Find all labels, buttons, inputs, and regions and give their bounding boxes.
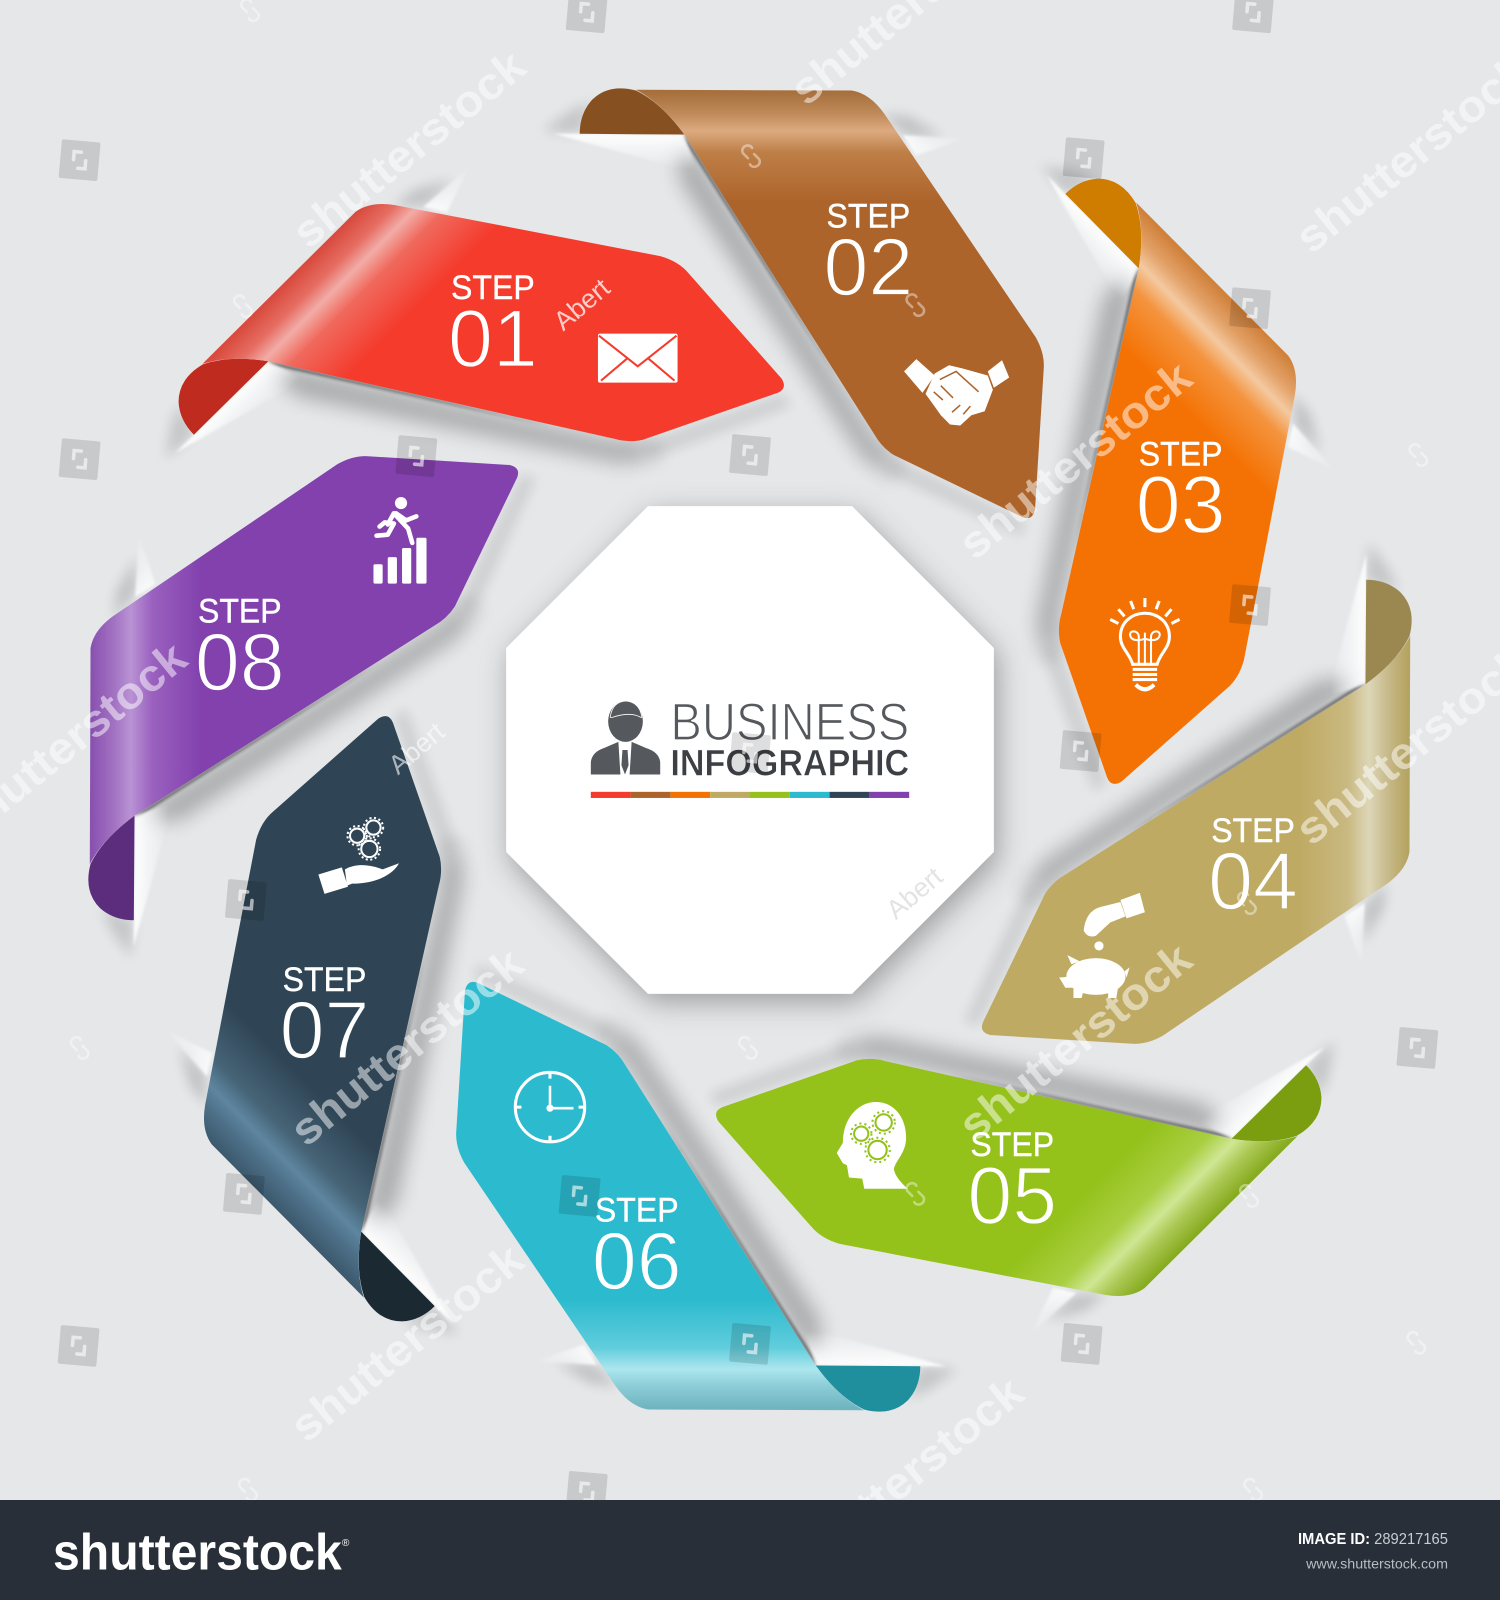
ribbon shape 04 <box>924 539 1500 1192</box>
step 06 number: 06 <box>592 1216 682 1307</box>
watermark: Abert <box>548 272 616 336</box>
watermark: Abert <box>383 716 451 780</box>
icon: runner on bar chart <box>373 497 427 584</box>
step 07 number: 07 <box>280 985 369 1076</box>
watermark: shutterstock <box>280 938 533 1156</box>
octagon face <box>506 506 994 994</box>
footer bar <box>0 1500 1500 1600</box>
footer logo: shutterstock <box>53 1523 342 1580</box>
step 04 label: STEP <box>1211 812 1295 850</box>
octagon shadow <box>510 514 998 1002</box>
step 08 number: 08 <box>195 617 285 708</box>
image id: IMAGE ID: 289217165 <box>1298 1531 1448 1548</box>
watermark: Abert <box>880 861 949 925</box>
panel: step 06 ribbon <box>308 924 961 1576</box>
watermark: shutterstock <box>280 1233 533 1452</box>
ribbon shape 01 <box>165 166 791 463</box>
heading: business: BUSINESS <box>670 693 909 752</box>
icon: light bulb <box>1110 598 1180 689</box>
icon: piggy bank <box>1059 893 1145 998</box>
panel: step 07 ribbon <box>166 709 463 1335</box>
panel: step 08 ribbon <box>0 308 576 961</box>
step 07 label: STEP <box>283 961 366 999</box>
panel: central octagon <box>506 506 998 1002</box>
icon: envelope <box>598 334 678 383</box>
ribbon shape 05 <box>709 1037 1335 1334</box>
panel: step 05 ribbon <box>709 1037 1335 1334</box>
step 06 label: STEP <box>595 1191 679 1229</box>
icon: clock <box>515 1072 585 1142</box>
icon: hand holding gears <box>318 818 399 894</box>
ribbon shape 06 <box>308 924 961 1576</box>
step 08 label: STEP <box>198 592 282 630</box>
step 03 label: STEP <box>1139 435 1222 473</box>
panel: step 02 ribbon <box>539 0 1192 576</box>
step 04 number: 04 <box>1208 836 1298 927</box>
watermark: shutterstock <box>282 40 535 258</box>
watermark: shutterstock <box>780 1366 1033 1584</box>
ribbon shape 07 <box>166 709 463 1335</box>
icon: businessman <box>591 701 660 774</box>
colour bar <box>591 792 909 798</box>
footer registered mark: ® <box>342 1538 350 1549</box>
ribbon shape 02 <box>539 0 1192 576</box>
watermark: shutterstock <box>949 351 1201 569</box>
step 01 number: 01 <box>448 293 538 384</box>
panel: step 04 ribbon <box>924 539 1500 1192</box>
website: www.shutterstock.com <box>1305 1556 1448 1572</box>
icon: handshake <box>904 359 1009 426</box>
heading: infographic: INFOGRAPHIC <box>670 743 909 784</box>
step 05 number: 05 <box>967 1150 1057 1241</box>
step 01 label: STEP <box>451 269 535 307</box>
ribbon shape 03 <box>1037 165 1334 791</box>
watermark: shutterstock <box>949 932 1201 1151</box>
step 02 number: 02 <box>823 222 913 313</box>
step 02 label: STEP <box>827 198 910 236</box>
panel: step 01 ribbon <box>165 166 791 463</box>
icon: head with gears <box>837 1102 907 1189</box>
panel: step 03 ribbon <box>1037 165 1334 791</box>
step 03 number: 03 <box>1136 460 1226 551</box>
step 05 label: STEP <box>970 1126 1054 1164</box>
ribbon shape 08 <box>0 308 576 961</box>
